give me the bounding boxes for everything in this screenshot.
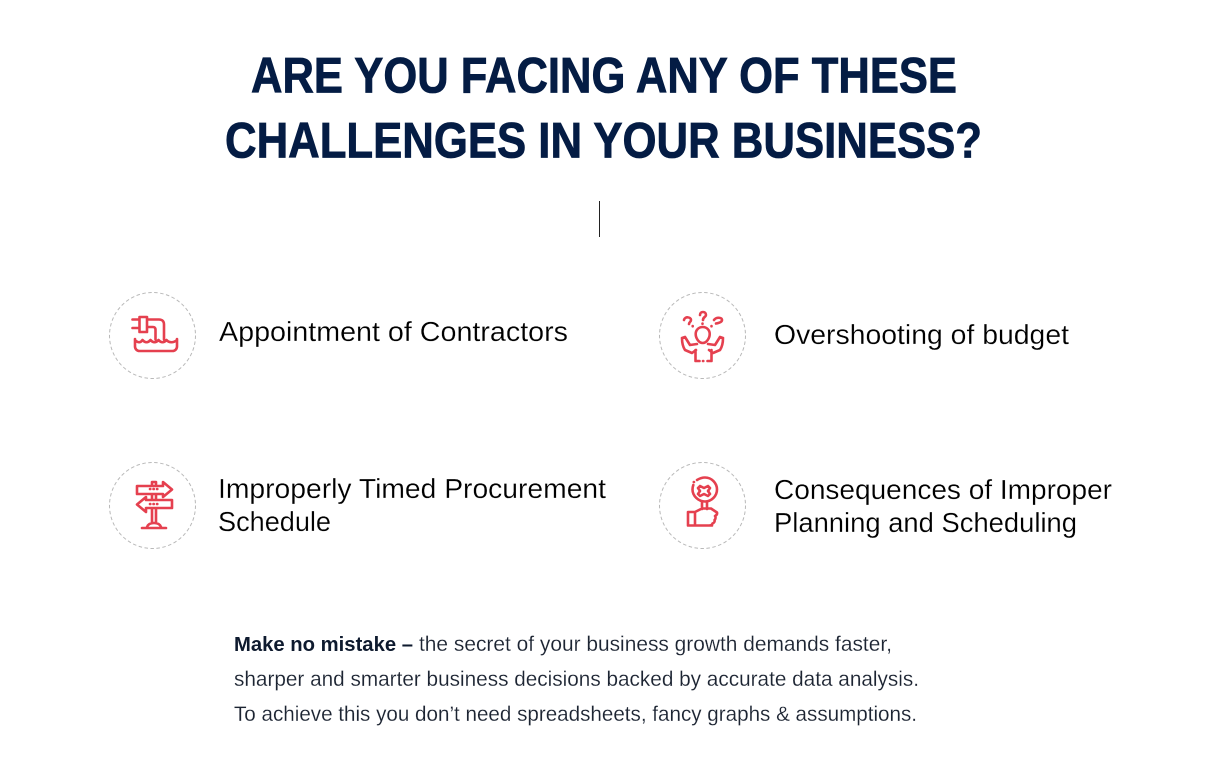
- icon: hand holding cross sign: [660, 462, 746, 548]
- item: improperly timed procurement schedule: Schedule: [218, 506, 331, 537]
- item: consequences of improper planning: [660, 462, 1112, 548]
- item: overshooting of budget: [660, 292, 1069, 378]
- label: Appointment of Contractors: [219, 316, 568, 347]
- icon: signpost: [110, 462, 196, 548]
- closing paragraph: Make no mistake –: [234, 633, 413, 656]
- title: [225, 47, 982, 168]
- item: consequences of improper planning: Planning and Scheduling: [774, 507, 1077, 538]
- item: improperly timed procurement schedule: [110, 462, 606, 548]
- closing paragraph: [234, 633, 919, 726]
- label: Overshooting of budget: [774, 319, 1069, 350]
- closing paragraph: To achieve this you don’t need spreadsheets, fancy graphs & assumptions.: [234, 703, 917, 726]
- closing paragraph: the secret of your business growth demands faster,: [419, 633, 892, 656]
- icon: confused person: [660, 292, 746, 378]
- label: Consequences of Improper: [774, 474, 1112, 505]
- title: CHALLENGES IN YOUR BUSINESS?: [225, 112, 982, 168]
- title: ARE YOU FACING ANY OF THESE: [251, 47, 957, 103]
- vertical divider: [599, 201, 600, 237]
- closing paragraph: sharper and smarter business decisions backed by accurate data analysis.: [234, 668, 919, 691]
- icon: pipe over water: [110, 292, 196, 378]
- item: appointment of contractors: [110, 292, 568, 378]
- label: Improperly Timed Procurement: [218, 473, 606, 504]
